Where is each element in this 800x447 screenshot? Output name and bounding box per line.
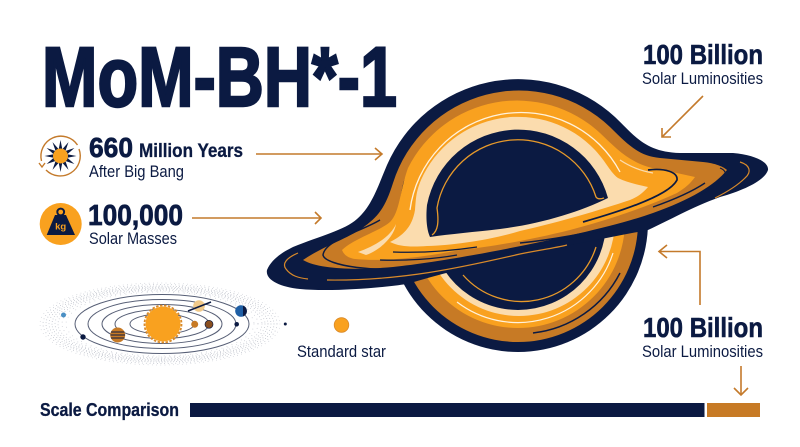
star dot <box>334 318 349 332</box>
star label: Standard star <box>297 342 386 361</box>
arrow: age to black hole <box>256 148 382 160</box>
lower ring: copper <box>398 102 638 342</box>
lower sphere silhouette <box>388 92 648 352</box>
callout label: Solar Luminosities <box>642 69 763 88</box>
dust disc <box>40 283 280 365</box>
title: MoM-BH*-1 <box>42 30 397 124</box>
lower ring navy streak <box>533 273 620 333</box>
lower ring highlight <box>457 253 613 323</box>
disc and upper dome: copper <box>303 91 727 269</box>
scale comparison <box>40 400 760 420</box>
stat: age after Big Bang: Million Years <box>139 141 243 162</box>
callout label: Solar Luminosities <box>642 342 763 361</box>
left cream tail <box>358 224 396 255</box>
inner thin arc <box>432 140 604 235</box>
lower inner arc <box>463 247 596 302</box>
disc and upper dome: cream <box>390 117 648 247</box>
callout: bottom luminosity <box>642 312 763 361</box>
solar system illustration <box>40 283 287 365</box>
scale bar: copper <box>707 403 760 417</box>
upper highlight <box>410 112 620 210</box>
arrow: bottom luminosity elbow <box>659 245 700 305</box>
stat label: After Big Bang <box>89 162 184 181</box>
lower ring: orange <box>411 114 625 328</box>
disc navy streaks <box>323 168 725 269</box>
icon: kg weight: kg <box>55 222 66 232</box>
disc and upper dome: navy <box>267 79 768 290</box>
planets <box>61 300 287 342</box>
black hole illustration <box>267 79 768 352</box>
arrow: top luminosity to black hole <box>662 96 703 137</box>
icon: explosion with circular arrow <box>39 136 80 176</box>
stat number: 660 Million Years: 660 <box>89 132 133 163</box>
scale heading: Scale Comparison <box>40 400 179 420</box>
disc outer copper streaks <box>284 162 749 280</box>
stat number: 100,000: 100,000 <box>88 200 183 232</box>
callout value: 100 Billion <box>643 312 763 343</box>
standard star <box>297 318 386 361</box>
stat: age after Big Bang <box>39 132 243 181</box>
right highlight <box>620 160 653 173</box>
scale bar: navy <box>190 403 704 417</box>
lower ring: inner navy <box>430 134 606 310</box>
black hole core <box>426 130 608 237</box>
icon: kg weight <box>40 203 82 245</box>
arrow: mass to black hole <box>192 212 321 224</box>
arrow: down to scale bar <box>734 366 748 395</box>
disc and upper dome: orange <box>342 101 695 260</box>
lower ring: cream <box>423 124 615 316</box>
orbits <box>75 294 249 354</box>
disc and upper dome: navy streak <box>396 105 490 216</box>
callout value: 100 Billion <box>643 39 763 70</box>
stat label: Solar Masses <box>89 229 177 248</box>
stat: mass <box>40 200 183 248</box>
sun <box>144 306 182 342</box>
callout: top luminosity <box>642 39 763 88</box>
